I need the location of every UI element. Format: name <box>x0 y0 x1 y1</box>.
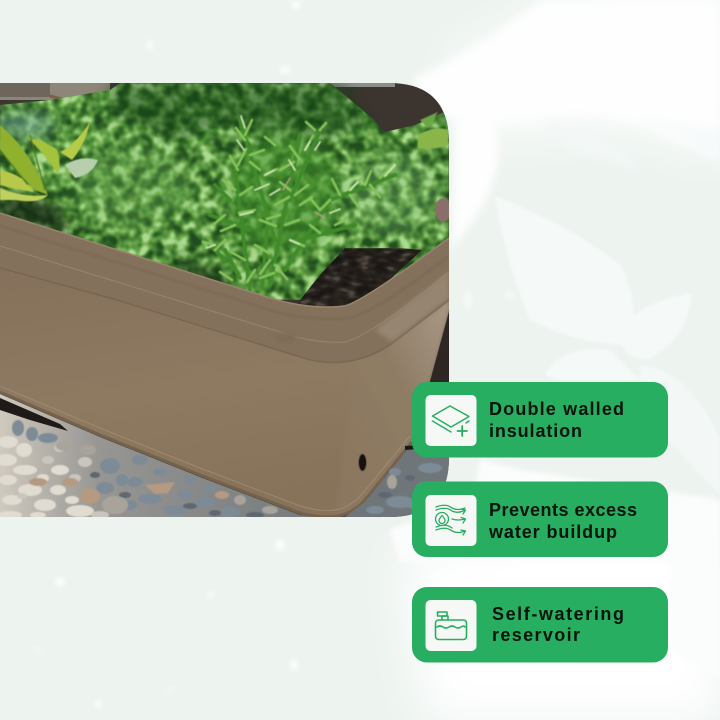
feature card: prevents excess water buildup <box>412 482 668 557</box>
photo backdrop <box>0 83 449 517</box>
foliage shading <box>0 83 440 295</box>
card text <box>488 500 637 542</box>
background leaves <box>495 196 720 495</box>
card text: Prevents excess <box>489 500 637 520</box>
photo: planter with herbs on gravel <box>0 83 451 520</box>
feature card: double walled insulation <box>412 382 668 458</box>
right dark gap <box>430 312 449 382</box>
drain hole <box>358 454 366 471</box>
yellow-green leaves <box>0 112 451 222</box>
card text: reservoir <box>492 625 580 645</box>
soil <box>296 248 422 308</box>
icon tile: layers with plus <box>426 395 476 446</box>
card text <box>489 399 624 441</box>
card text: insulation <box>489 421 582 441</box>
card text <box>492 604 624 645</box>
planter rim <box>0 213 449 363</box>
feature card: self-watering reservoir <box>412 587 668 662</box>
herbs <box>0 83 451 300</box>
card text: Self-watering <box>492 604 624 624</box>
rosemary <box>203 116 395 292</box>
card text: Double walled <box>489 399 624 419</box>
icon tile: water tank <box>426 600 476 651</box>
gravel <box>0 394 449 520</box>
icon tile: water flow <box>426 495 476 546</box>
planter body <box>0 213 449 517</box>
card text: water buildup <box>488 522 617 542</box>
